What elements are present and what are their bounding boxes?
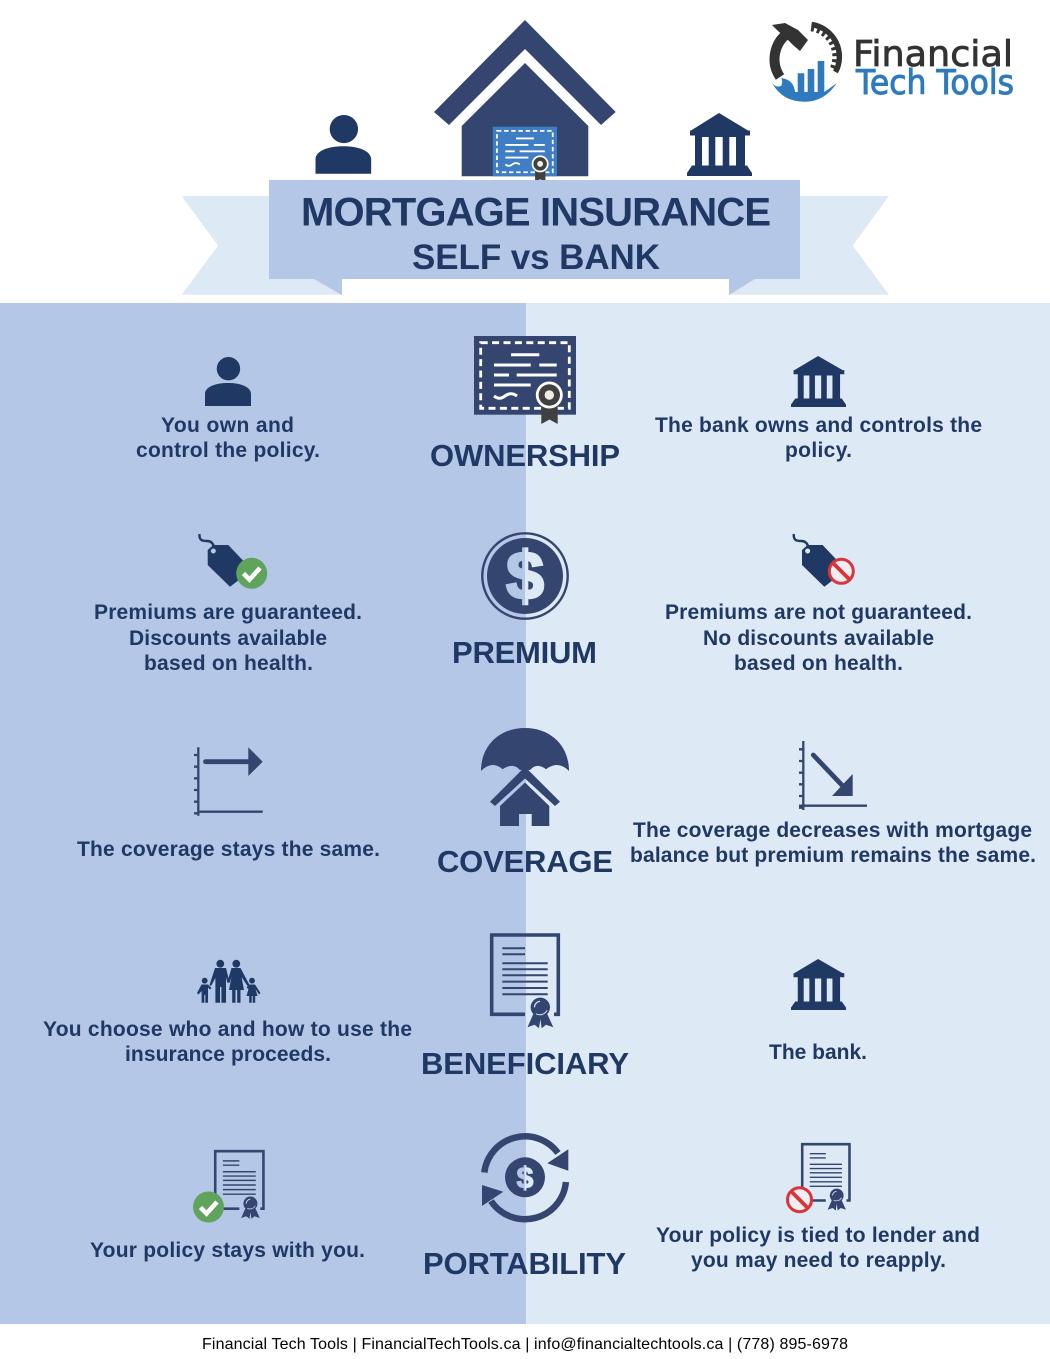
icon: circular dollar arrows [482, 1136, 568, 1219]
top header: white background [0, 0, 1050, 303]
text: bank premium: based on health. [734, 652, 903, 675]
text: bank ownership: The bank owns and controls the [655, 414, 982, 437]
text: self beneficiary: You choose who and how to use the [43, 1018, 412, 1041]
title: MORTGAGE INSURANCE [301, 190, 771, 234]
icon: document with seal [492, 935, 558, 1028]
text: bank premium: Premiums are not guaranteed. [665, 601, 972, 624]
text: self premium: based on health. [144, 652, 313, 675]
text: self premium: Premiums are guaranteed. [94, 601, 362, 624]
text: bank beneficiary: The bank. [769, 1041, 867, 1064]
logo: Financial Tech Tools [772, 23, 1014, 103]
logo wordmark: Tech Tools [855, 63, 1014, 103]
row: premium [94, 533, 972, 675]
icon: document with prohibited sign [788, 1144, 849, 1212]
logo wordmark [853, 34, 1014, 103]
icon: falling chart arrow [799, 741, 867, 810]
text: self ownership: control the policy. [136, 439, 320, 462]
icon: certificate [474, 336, 576, 424]
logo wordmark: Financial [853, 34, 1013, 75]
row: beneficiary [43, 935, 867, 1081]
icon: person (header) [316, 115, 371, 174]
icon: person [205, 357, 251, 406]
icon: house with certificate [434, 20, 616, 182]
text: self beneficiary: insurance proceeds. [125, 1043, 331, 1066]
subtitle: SELF vs BANK [412, 238, 660, 277]
row: portability [90, 1136, 980, 1281]
panel: self side background [0, 303, 526, 1324]
heading: portability: PORTABILITY [423, 1246, 626, 1281]
icon: bank [791, 356, 846, 407]
panel: bank side background [526, 303, 1050, 1324]
text: self portability: Your policy stays with you. [90, 1239, 365, 1262]
icon: document with check [193, 1151, 263, 1222]
logo mark [772, 23, 839, 102]
text: bank portability: you may need to reapply. [691, 1249, 946, 1272]
text: bank premium: No discounts available [703, 627, 934, 650]
heading: coverage: COVERAGE [437, 844, 613, 879]
icon: dollar coin: $ [506, 538, 544, 614]
icon: umbrella over house [481, 728, 569, 826]
footer contact line: Financial Tech Tools | FinancialTechTools.ca | info@financialtechtools.ca | (778) 895-6978 [202, 1336, 848, 1353]
title ribbon banner [182, 180, 889, 295]
text: bank coverage: The coverage decreases with mortgage [633, 819, 1032, 842]
icon: circular dollar arrows: $ [517, 1162, 534, 1195]
heading: beneficiary: BENEFICIARY [421, 1046, 629, 1081]
text: self ownership: You own and [161, 414, 294, 437]
icon: tag with prohibited sign [794, 534, 853, 587]
text: self coverage: The coverage stays the same. [77, 838, 380, 861]
icon: bank (header) [687, 113, 752, 176]
icon: bank [791, 959, 846, 1010]
text: bank portability: Your policy is tied to lender and [656, 1224, 980, 1247]
icon: flat chart arrow [194, 747, 263, 816]
row: ownership [136, 336, 982, 473]
icon: tag with check [199, 534, 267, 589]
row: coverage [77, 728, 1036, 879]
text: self premium: Discounts available [129, 627, 327, 650]
icon: dollar coin [482, 533, 568, 619]
heading: premium: PREMIUM [452, 635, 597, 670]
heading: ownership: OWNERSHIP [430, 438, 620, 473]
text: bank coverage: balance but premium remains the same. [630, 844, 1036, 867]
text: bank ownership: policy. [785, 439, 852, 462]
icon: family [197, 960, 260, 1003]
